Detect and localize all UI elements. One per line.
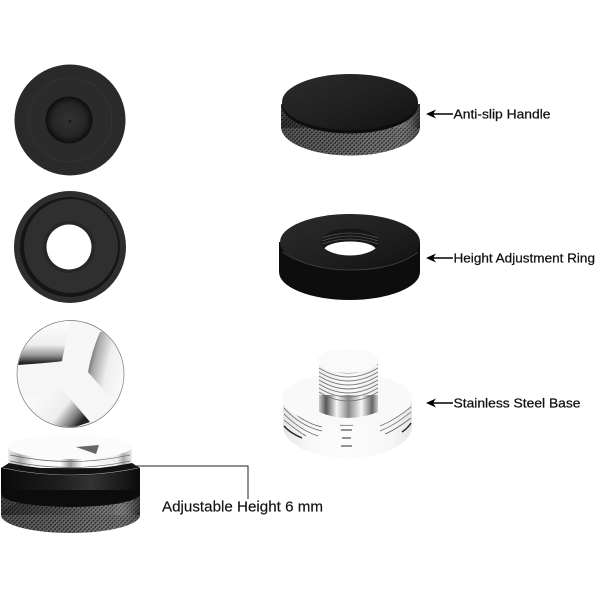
photo: handle underside: [14, 64, 126, 176]
threaded stem: [318, 349, 378, 418]
steel base on top: [8, 435, 132, 475]
arrow: stainless steel base: [426, 398, 453, 408]
photo: height adjustment ring: [279, 214, 420, 300]
label: anti-slip handle: Anti-slip Handle: [454, 106, 550, 122]
arrow: anti-slip handle: [426, 110, 453, 118]
label: height adjustment ring: Height Adjustment Ring: [454, 250, 595, 266]
infographic canvas: [1, 64, 594, 533]
lower disc: [282, 373, 412, 458]
photo: anti-slip handle: [281, 74, 420, 156]
label: adjustable height: Adjustable Height 6 mm: [162, 500, 323, 516]
knurled handle: [1, 492, 140, 533]
label: stainless steel base: Stainless Steel Base: [454, 396, 580, 410]
black height ring: [1, 463, 140, 507]
photo: stainless steel base: [282, 349, 412, 458]
leader line: adjustable height: [132, 466, 248, 499]
photo: steel base face: [14, 320, 128, 432]
photo: ring underside: [14, 191, 126, 303]
arrow: height adjustment ring: [426, 254, 453, 262]
photo: assembled distributor: [1, 435, 140, 533]
